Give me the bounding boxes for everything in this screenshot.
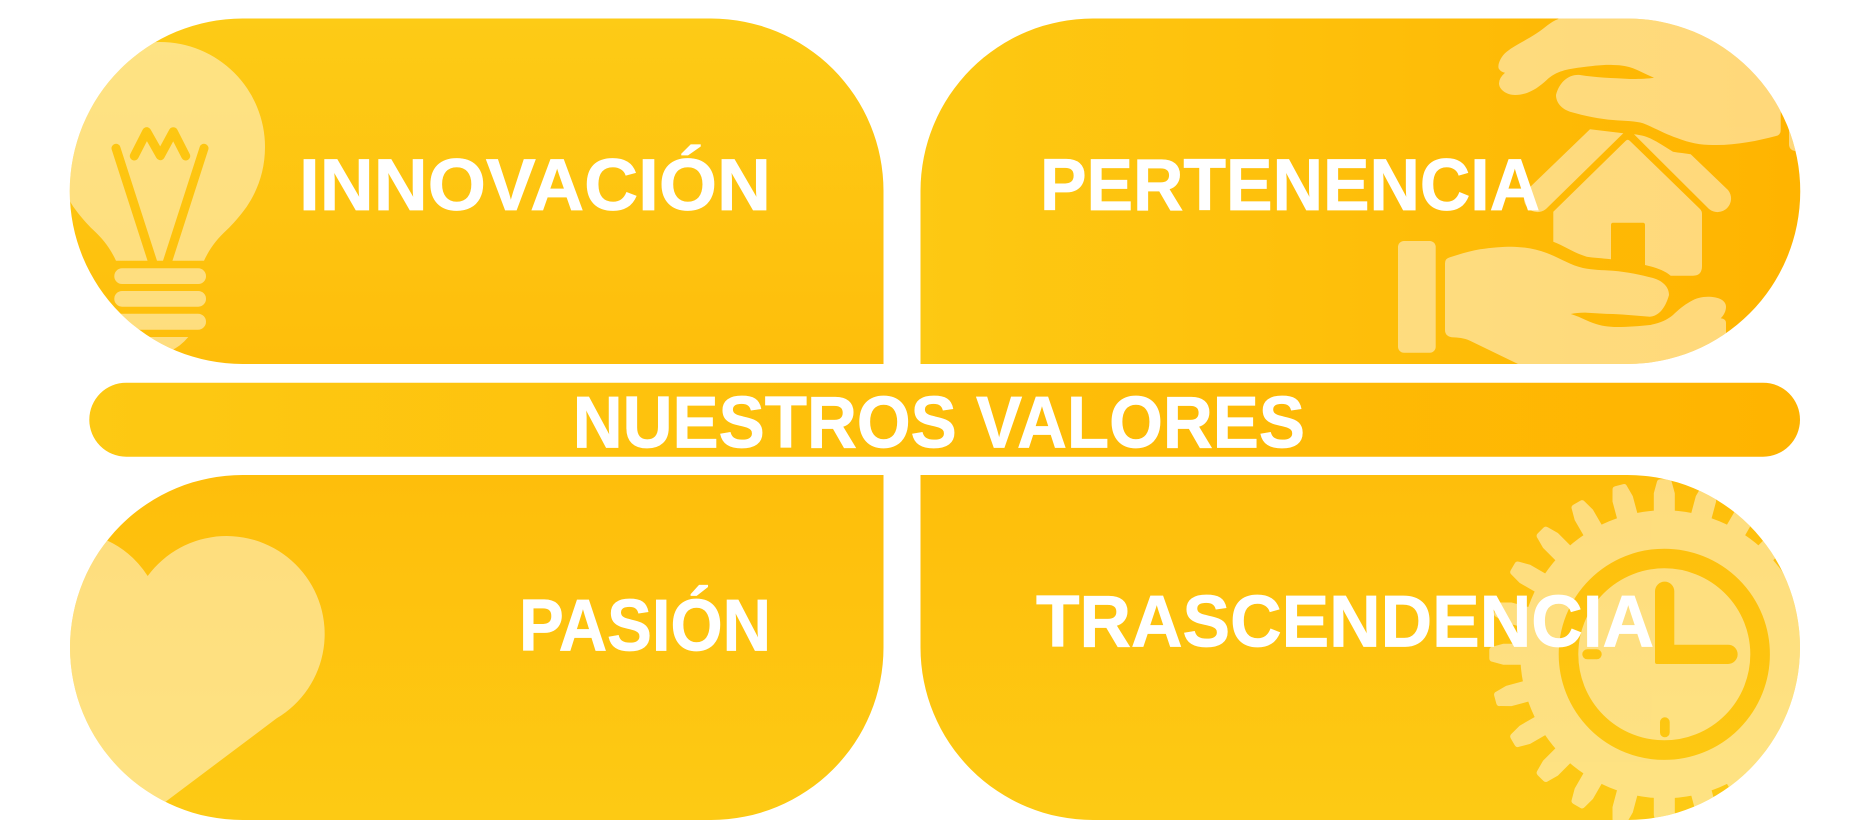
heading: innovación: INNOVACIÓN — [299, 143, 771, 226]
title bar: nuestros valores — [89, 381, 1800, 464]
icon: heart — [70, 536, 325, 802]
heading: trascendencia: TRASCENDENCIA — [1036, 580, 1654, 663]
icon: hands protecting a house — [1398, 18, 1796, 364]
heading: nuestros valores: NUESTROS VALORES — [573, 381, 1305, 464]
panel: pasión — [70, 475, 884, 820]
panel: pertenencia — [920, 18, 1800, 364]
icon: light bulb — [70, 42, 265, 350]
icon: clock in gear — [1489, 479, 1821, 829]
heading: pertenencia: PERTENENCIA — [1040, 143, 1540, 226]
panel: innovación — [55, 18, 884, 375]
heading: pasión: PASIÓN — [519, 584, 771, 667]
panel: trascendencia — [920, 475, 1821, 829]
